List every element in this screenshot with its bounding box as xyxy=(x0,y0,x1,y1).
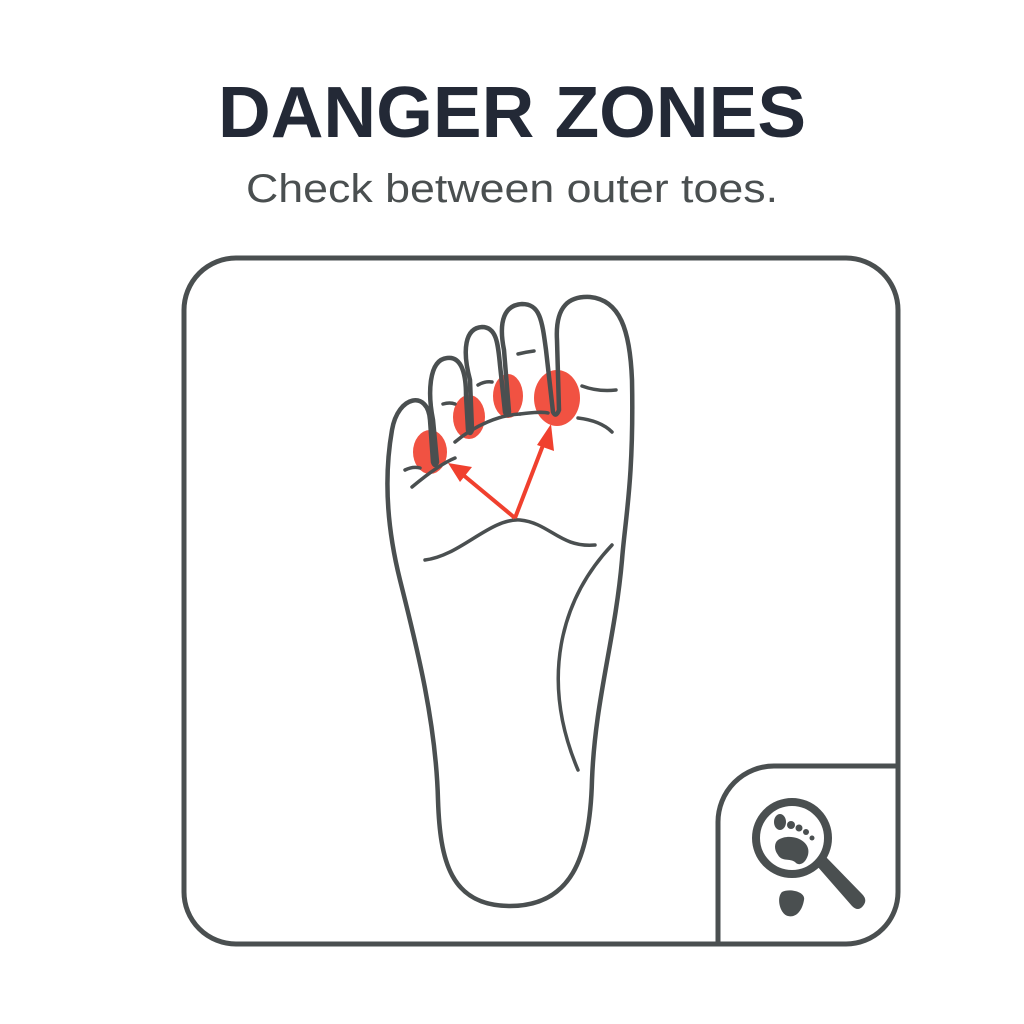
icon: magnifier with footprint xyxy=(756,802,865,916)
arrows xyxy=(448,424,554,518)
foot outline xyxy=(387,297,632,906)
red danger zones xyxy=(413,370,580,474)
panel: foot frame xyxy=(184,258,898,944)
foot diagram xyxy=(387,297,632,906)
subtitle: Check between outer toes. xyxy=(246,167,778,211)
title: DANGER ZONES xyxy=(218,73,806,153)
icon panel: inspect foot xyxy=(718,766,898,944)
foot creases xyxy=(405,351,616,770)
